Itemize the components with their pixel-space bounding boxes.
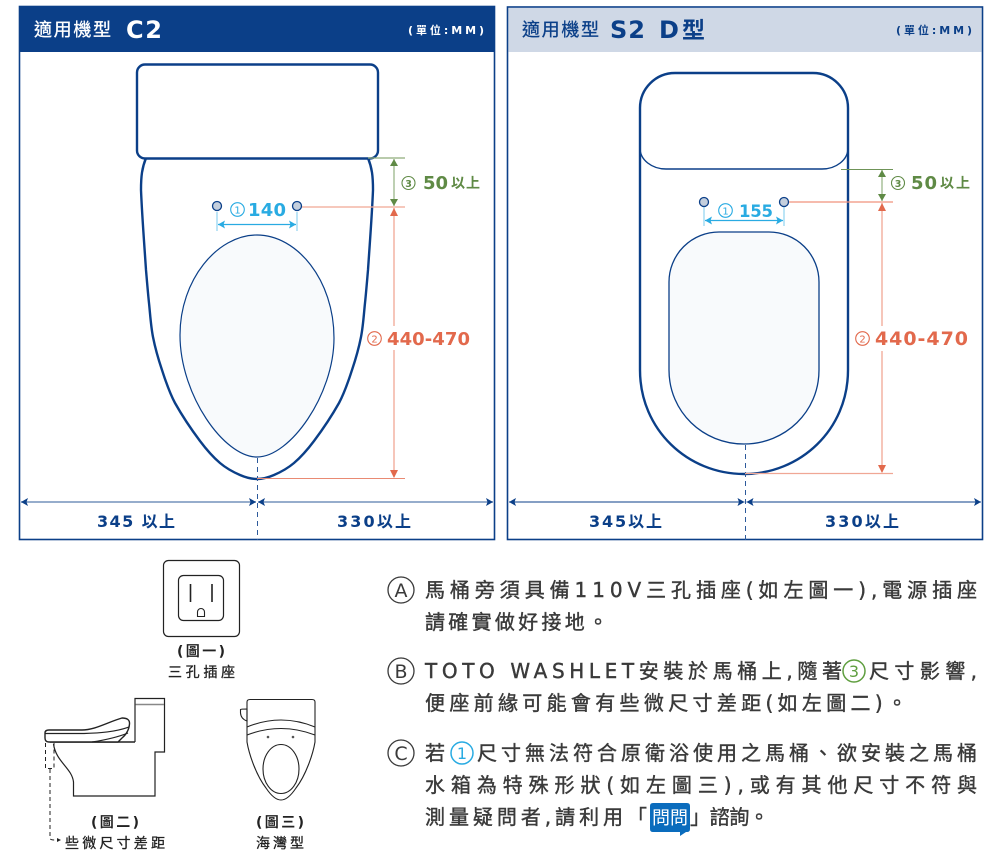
caption: figure 1: (圖一) [177,644,225,660]
figure 2: toilet side view [45,698,165,852]
panel: model C2 [19,6,495,540]
dimension 2: 440-470 S2: 2 [859,334,866,346]
header bar C2: (單位:MM) [408,23,484,37]
text B: TOTO WASHLET安裝於馬桶上,隨著 [424,659,842,683]
dimension 2: 440-470 C2: 2 [371,334,378,346]
dimension 3: 50 clearance S2: 3 [895,179,901,190]
text C: 」諮詢。 [690,805,769,829]
text A: 馬桶旁須具備110V三孔插座(如左圖一),電源插座 [425,578,977,602]
note A [388,577,977,634]
panel frame S2 [508,7,982,540]
toilet outline C2 [137,64,378,479]
badge C: C [394,743,408,765]
dimension 3: 50 clearance C2 [368,158,480,206]
header bar C2: 適用機型 [34,20,111,41]
dimension: centre and side clearances S2: 330以上 [825,512,899,531]
caption: figure 2: 些微尺寸差距 [65,836,165,852]
dimension 1: 155 hole spacing: 155 [739,202,773,221]
dimension 2: 440-470 S2: 440-470 [875,328,968,350]
dimension 3: 50 clearance C2: 以上 [451,176,480,192]
dimension: centre and side clearances C2 [21,458,493,540]
figure 3: bay-type toilet top view [240,700,315,852]
text C: 測量疑問者,請利用「 [425,805,647,829]
badge C [388,740,414,766]
text B: 尺寸影響, [869,659,977,683]
note C [388,740,977,836]
panel: model S2 D [508,7,982,540]
caption: figure 1: 三孔插座 [168,665,235,681]
icon: outlet [164,560,240,636]
panel frame C2 [20,6,494,540]
text A [425,578,977,634]
dimension 1: 140 hole spacing: 140 [248,200,286,221]
toilet outline S2 [640,73,848,474]
dimension 3: 50 clearance C2: 3 [405,179,412,190]
header bar S2 [508,8,982,52]
dimension 3: 50 clearance C2: 50 [423,173,448,194]
caption: figure 2: (圖二) [91,815,139,831]
text C: 尺寸無法符合原衛浴使用之馬桶、欲安裝之馬桶 [477,741,977,765]
dimension 1: 155 hole spacing [700,198,788,226]
text B [424,659,977,715]
dimension 1: 140 hole spacing [212,200,302,231]
note B [388,658,977,715]
text C: 水箱為特殊形狀(如左圖三),或有其他尺寸不符與 [425,773,977,797]
text A: 請確實做好接地。 [425,610,608,634]
header bar S2: 適用機型 [522,20,599,41]
caption: figure 3: (圖三) [256,815,304,831]
icon: toilet top view [240,700,315,800]
header bar S2: 型 [682,18,705,44]
dimension 2: 440-470 C2 [257,207,470,478]
badge B: B [394,661,408,683]
caption: figure 3: 海灣型 [256,836,304,852]
text C [425,741,977,829]
dimension 1: 155 hole spacing: 1 [722,206,729,218]
figure 1: three-hole outlet [164,560,240,681]
caption: figure 3 [256,815,304,852]
text B: 3 [849,662,859,681]
text C: 若 [425,741,445,765]
header bar S2: D [659,16,679,44]
header bar S2: (單位:MM) [896,23,972,37]
badge B [388,658,414,684]
badge A: A [394,580,408,602]
header bar C2 [19,6,495,52]
text B: 便座前緣可能會有些微尺寸差距(如左圖二)。 [425,691,907,715]
dimension 3: 50 clearance S2: 以上 [940,176,970,192]
header bar C2: C2 [126,16,162,44]
dimension 1: 140 hole spacing: 1 [234,206,241,216]
icon: ask button [650,803,690,836]
caption: figure 2 [65,815,165,852]
dimension 2: 440-470 C2: 440-470 [387,329,470,350]
dimension: centre and side clearances C2: 330以上 [337,512,411,531]
dimension 3: 50 clearance S2 [841,170,970,201]
icon: ask button: 問問 [652,808,688,829]
dimension: centre and side clearances C2: 345 以上 [97,512,175,531]
icon: toilet side view [45,698,164,842]
dimension: centre and side clearances S2: 345以上 [589,512,662,531]
caption: figure 1 [168,644,235,681]
dimension: centre and side clearances S2 [509,445,981,540]
dimension 2: 440-470 S2 [745,202,968,474]
header bar S2: S2 [610,16,645,44]
badge A [388,577,414,603]
text C: 1 [457,744,467,763]
dimension 3: 50 clearance S2: 50 [911,173,937,194]
